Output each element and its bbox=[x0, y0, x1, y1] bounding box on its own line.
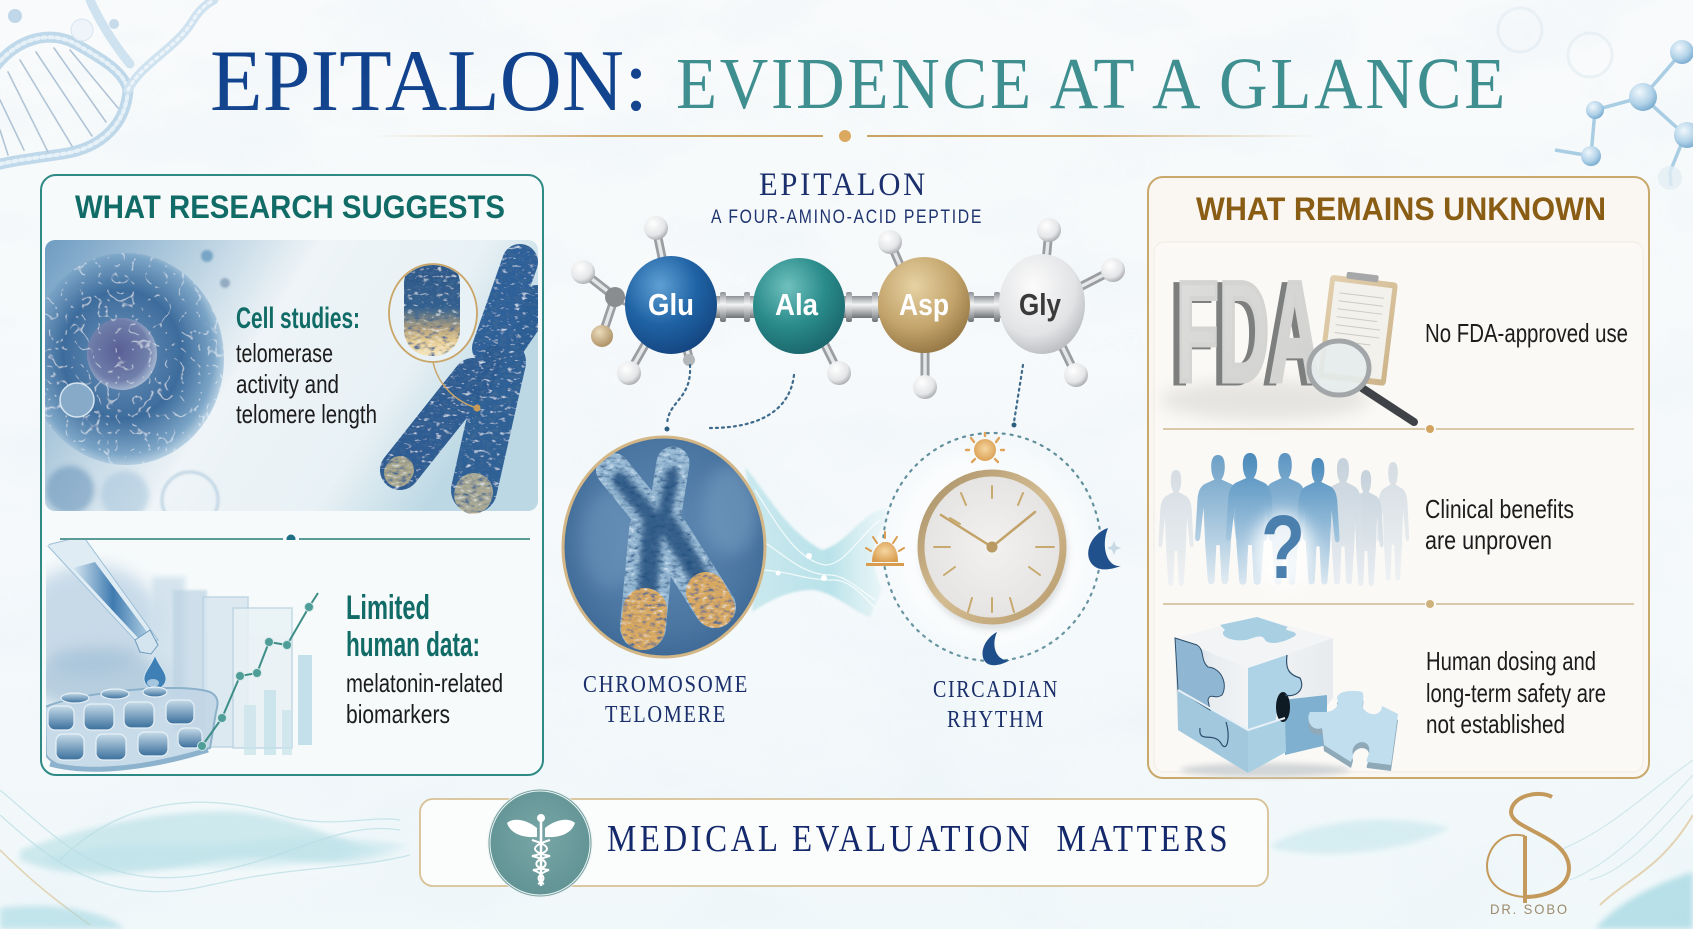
image: pipette, well plate and lab glass bbox=[46, 540, 312, 772]
text: limited human data: human data: bbox=[346, 626, 480, 664]
divider bbox=[1163, 600, 1634, 608]
dotted connectors bbox=[664, 365, 1023, 432]
icon: moon bottom bbox=[982, 632, 1010, 665]
panel: what remains unknown bbox=[1148, 177, 1649, 778]
image panel: cell studies bbox=[28, 240, 538, 528]
line chart bbox=[198, 593, 318, 750]
text: human dosing bbox=[1426, 646, 1606, 739]
label: chromosome telomere: TELOMERE bbox=[605, 702, 727, 728]
icon: caduceus medallion bbox=[489, 790, 591, 896]
title: EPITALON: bbox=[210, 33, 648, 130]
text: human dosing: not established bbox=[1426, 709, 1565, 739]
title divider bbox=[370, 130, 1320, 142]
inner card bbox=[1154, 242, 1643, 772]
text: limited human data bbox=[346, 589, 503, 729]
magnifier inset bbox=[389, 258, 480, 412]
logo: Dr. Sobo bbox=[1487, 794, 1569, 917]
title bbox=[210, 33, 1508, 130]
DNA helix decoration bbox=[0, 0, 214, 165]
text: clinical benefits bbox=[1425, 494, 1574, 555]
atom: Asp bbox=[878, 257, 970, 353]
bottom left waves bbox=[0, 790, 420, 929]
text: clinical benefits: Clinical benefits bbox=[1425, 494, 1574, 524]
divider bbox=[60, 534, 530, 544]
atom: Ala: Ala bbox=[775, 287, 819, 322]
circadian clock bbox=[883, 433, 1101, 661]
atom: Gly bbox=[999, 254, 1085, 354]
icon: moon right bbox=[1088, 528, 1121, 569]
illustration: FDA letters with clipboard and magnifier: FDA bbox=[1176, 253, 1320, 412]
heading: what remains unknown: WHAT REMAINS UNKNOWN bbox=[1196, 191, 1606, 227]
chromosome arms bbox=[613, 463, 715, 628]
label: chromosome telomere: CHROMOSOME bbox=[583, 672, 749, 698]
illustration: people with question mark bbox=[1158, 453, 1409, 598]
text: limited human data: biomarkers bbox=[346, 699, 450, 729]
atom: Glu: Glu bbox=[648, 287, 694, 322]
text: human dosing: Human dosing and bbox=[1426, 646, 1596, 676]
label: circadian rhythm: CIRCADIAN bbox=[933, 677, 1059, 703]
text: limited human data: Limited bbox=[346, 589, 430, 627]
text: cell studies bbox=[236, 302, 377, 429]
flowing wave link bbox=[745, 467, 888, 617]
text: no FDA-approved use: No FDA-approved use bbox=[1425, 318, 1628, 348]
text: cell studies: Cell studies: bbox=[236, 302, 360, 335]
banner: medical evaluation matters bbox=[420, 790, 1268, 896]
text: limited human data: melatonin-related bbox=[346, 668, 503, 698]
text: clinical benefits: are unproven bbox=[1425, 525, 1552, 555]
atom: Ala bbox=[753, 258, 845, 354]
banner text: MEDICAL EVALUATION MATTERS bbox=[607, 818, 1231, 860]
atom: Gly: Gly bbox=[1019, 287, 1062, 322]
illustration: puzzle cube bbox=[1175, 617, 1398, 777]
text: human dosing: long-term safety are bbox=[1426, 678, 1606, 708]
center heading: EPITALON bbox=[759, 167, 928, 203]
icon: sun bbox=[966, 433, 1004, 462]
heading: what research suggests: WHAT RESEARCH SUGGESTS bbox=[75, 189, 505, 225]
label: circadian rhythm bbox=[933, 677, 1059, 733]
icon: sunrise bbox=[866, 532, 904, 566]
logo: Dr. Sobo: DR. SOBO bbox=[1490, 901, 1569, 917]
text: cell studies: telomere length bbox=[236, 399, 377, 429]
title: EVIDENCE AT A GLANCE bbox=[676, 43, 1508, 124]
atom: Glu bbox=[625, 256, 717, 354]
center heading bbox=[711, 167, 983, 228]
text: cell studies: telomerase bbox=[236, 338, 333, 368]
illustration: people with question mark: ? bbox=[1261, 498, 1305, 598]
chromosome bbox=[398, 262, 537, 495]
label: chromosome telomere bbox=[583, 672, 749, 728]
panel: what research suggests bbox=[20, 175, 543, 775]
text: cell studies: activity and bbox=[236, 369, 339, 399]
peptide molecule bbox=[571, 216, 1125, 399]
atom: Asp: Asp bbox=[899, 287, 949, 322]
chromosome circle bbox=[563, 437, 765, 657]
bottom right waves bbox=[1272, 760, 1693, 929]
molecule decoration top right bbox=[1498, 8, 1693, 249]
center heading: A FOUR-AMINO-ACID PEPTIDE bbox=[711, 207, 983, 228]
label: circadian rhythm: RHYTHM bbox=[947, 707, 1045, 733]
divider bbox=[1163, 425, 1634, 433]
